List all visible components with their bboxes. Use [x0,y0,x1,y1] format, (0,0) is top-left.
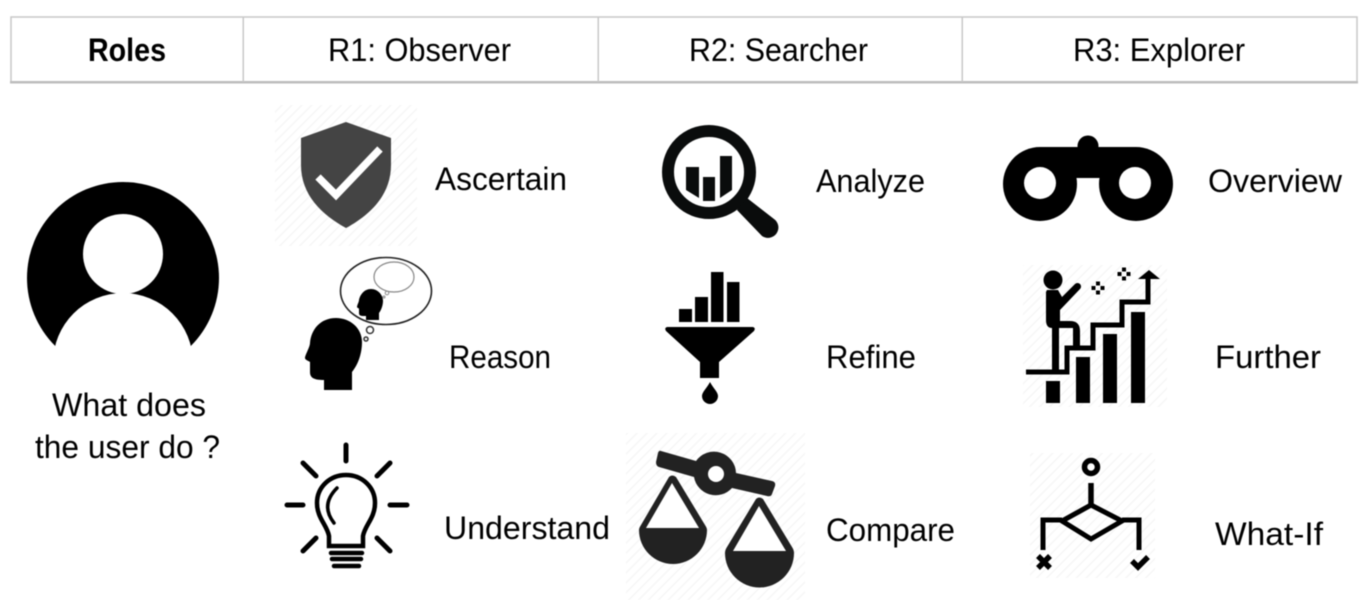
question text: the user do ? [35,429,220,465]
icon: funnel with bars [665,272,755,404]
icon: shield with check [275,105,417,246]
icon: climbing stairs with bars [1023,265,1167,407]
icon: user [20,182,226,433]
icon: decision flowchart [1030,453,1155,578]
label: Reason: Reason [449,339,551,375]
label: Refine: Refine [826,339,916,375]
header table [10,17,1358,84]
question text: What does [52,387,206,423]
label: Overview: Overview [1208,163,1343,199]
label: Compare: Compare [826,512,955,548]
icon: head with thought bubble [305,258,432,390]
header: R3 Explorer: R3: Explorer [1073,32,1245,68]
header: R1 Observer: R1: Observer [328,32,511,68]
icon: balance scales [626,433,805,600]
header: R2 Searcher: R2: Searcher [689,32,868,68]
icon: binoculars [1003,136,1173,221]
label: Further: Further [1215,339,1321,375]
icon: magnifier with bars [668,131,778,238]
label: Understand: Understand [444,510,610,546]
question text [35,387,220,465]
label: Analyze: Analyze [816,163,925,199]
header: Roles: Roles [88,32,166,68]
label: What-If: What-If [1215,516,1323,552]
icon: light bulb [287,445,407,566]
label: Ascertain: Ascertain [435,161,567,197]
